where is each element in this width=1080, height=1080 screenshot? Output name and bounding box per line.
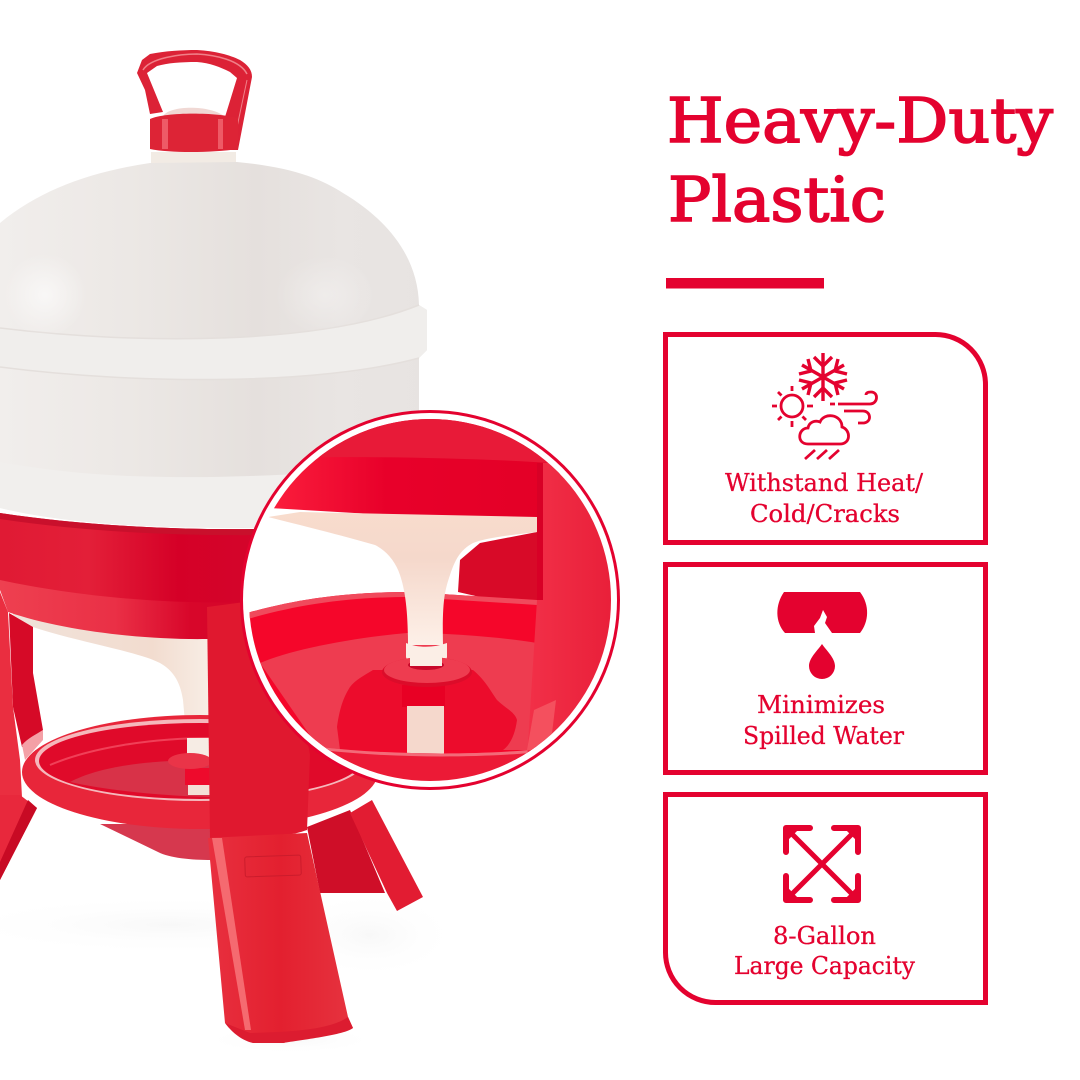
label <box>743 691 905 750</box>
label: 8-Gallon <box>773 922 876 950</box>
upper red collar <box>274 419 560 517</box>
heading: Heavy-Duty <box>667 84 1053 157</box>
icon: weather <box>772 353 877 459</box>
divider bar <box>666 278 824 288</box>
zoomed detail photo <box>245 415 620 800</box>
product photo: poultry waterer <box>0 50 460 1054</box>
nozzle cup <box>382 658 472 707</box>
funnel <box>268 512 537 645</box>
stem nipple <box>168 738 212 795</box>
front rim <box>325 748 530 781</box>
label: Cold/Cracks <box>750 500 900 528</box>
cloud <box>800 416 849 444</box>
translucent tank <box>0 162 427 528</box>
nipple collar <box>406 643 447 658</box>
label <box>725 469 924 528</box>
label: Withstand Heat/ <box>725 469 924 497</box>
sun <box>772 386 813 427</box>
main leg <box>207 600 310 840</box>
wind <box>830 392 877 423</box>
panel: 8-gallon capacity <box>666 794 986 1002</box>
magnified circle callout <box>240 410 620 800</box>
funnel and stem <box>13 610 212 745</box>
floor shadow <box>0 890 460 1054</box>
panel: withstand heat cold cracks <box>666 334 986 542</box>
handle <box>137 50 252 150</box>
back leg <box>458 532 537 600</box>
label: Spilled Water <box>743 722 905 750</box>
heading <box>667 84 1053 236</box>
lower stem <box>407 706 444 756</box>
cone under tray <box>100 824 212 860</box>
red collar <box>0 513 255 640</box>
tray rim <box>247 592 537 760</box>
left leg <box>0 592 43 880</box>
drip tray <box>22 715 378 829</box>
screw cap <box>150 108 238 152</box>
snowflake <box>799 353 847 401</box>
heading: Plastic <box>668 163 886 236</box>
label <box>734 922 915 980</box>
icon: dripping trough <box>777 592 867 679</box>
label: Large Capacity <box>734 952 915 980</box>
icon: expand arrows <box>786 828 858 900</box>
panel: minimizes spilled water <box>666 564 986 772</box>
main foot <box>208 833 353 1043</box>
front leg <box>528 463 611 752</box>
tray floor <box>260 633 537 750</box>
rain <box>805 450 839 459</box>
back foot <box>307 800 423 911</box>
label: Minimizes <box>757 691 885 719</box>
bottle neck <box>151 152 236 166</box>
